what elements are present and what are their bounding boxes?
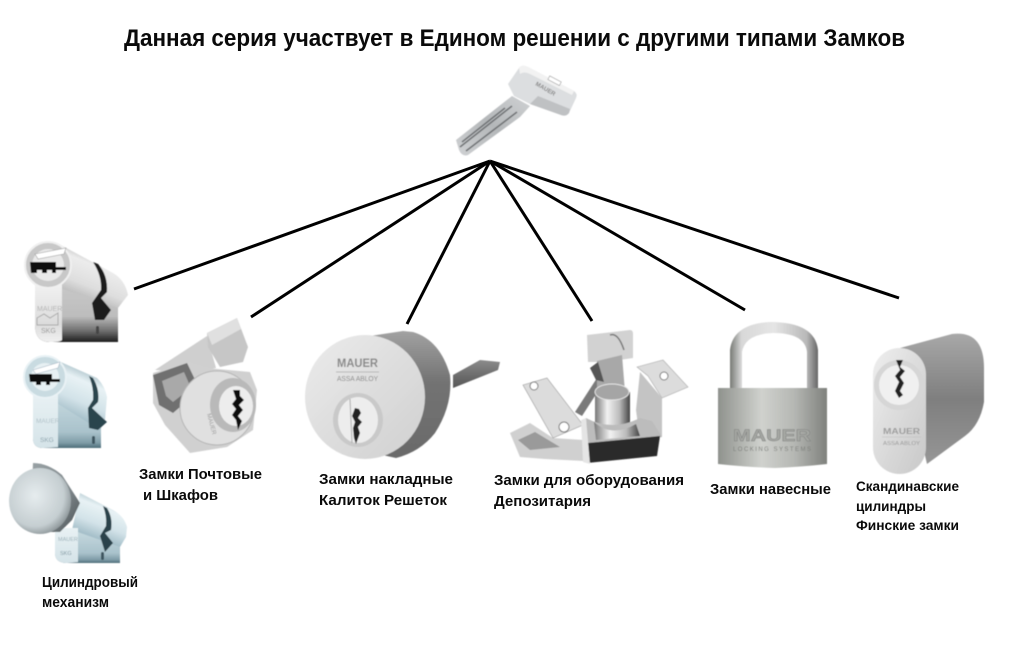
label: depository locks: Депозитария (494, 494, 591, 510)
icon: cylinder with thumb knob: MAUER (58, 537, 78, 543)
icon: rim cylinder: ASSA ABLOY (337, 374, 378, 383)
label: scandinavian and finnish locks: цилиндры (856, 499, 926, 514)
label: mail and cabinet locks (139, 467, 262, 504)
label: rim locks (319, 472, 453, 509)
label: cylinder mechanism (42, 575, 138, 611)
icon: cam lock for mailboxes: MAUER (205, 413, 217, 436)
label: depository locks: Замки для оборудования (494, 473, 684, 489)
icon: cylinder with thumb knob (9, 463, 127, 563)
label: padlocks: Замки навесные (710, 482, 831, 498)
label: depository locks (494, 473, 684, 510)
icon: depository equipment lock (510, 330, 688, 464)
icon: key: MAUER (534, 82, 557, 98)
icon: euro cylinder, blue: SKG (40, 437, 54, 444)
icon: cam lock for mailboxes (153, 318, 257, 453)
icon: scandinavian oval cylinder (873, 334, 984, 474)
icon: euro cylinder, silver (25, 242, 128, 342)
title: Данная серия участвует в Едином решении с другими типами Замков (124, 25, 905, 52)
label: mail and cabinet locks: Замки Почтовые (139, 467, 262, 483)
icon: padlock: MAUER (733, 426, 811, 445)
label: rim locks: Калиток Решеток (319, 493, 448, 509)
icon: euro cylinder, silver: MAUER (37, 306, 62, 313)
icon: scandinavian oval cylinder: ASSA ABLOY (883, 441, 920, 447)
label: rim locks: Замки накладные (319, 472, 453, 488)
icon: euro cylinder, silver: SKG (41, 328, 56, 335)
label: cylinder mechanism: Цилиндровый (42, 575, 138, 591)
label: scandinavian and finnish locks: Скандинавские (856, 479, 959, 494)
label: scandinavian and finnish locks: Финские замки (856, 518, 959, 533)
icon: euro cylinder, blue: MAUER (36, 418, 60, 425)
icon: scandinavian oval cylinder: MAUER (883, 427, 920, 436)
icon: euro cylinder, blue (24, 355, 107, 448)
icon: cylinder with thumb knob: SKG (60, 551, 72, 557)
icon: padlock (718, 322, 827, 468)
label: mail and cabinet locks: и Шкафов (143, 488, 218, 504)
icon: padlock: LOCKING SYSTEMS (733, 447, 811, 453)
icon: rim cylinder: MAUER (337, 356, 378, 370)
icon: rim cylinder (305, 331, 500, 459)
label: scandinavian and finnish locks (856, 479, 959, 533)
icon: key (456, 66, 577, 155)
label: cylinder mechanism: механизм (42, 595, 109, 611)
connector lines (134, 161, 899, 324)
